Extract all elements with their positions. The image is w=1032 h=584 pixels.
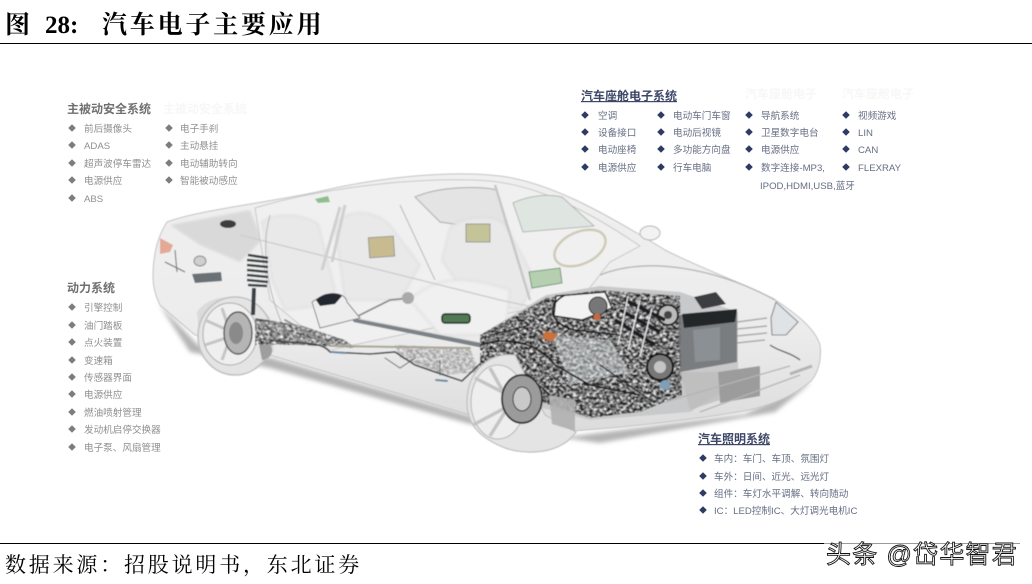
cabin list: 电动座椅 [598,144,637,156]
transmission [312,292,414,328]
engine bay [480,286,767,420]
radiator block [678,310,737,372]
faded ghost headings [745,86,914,101]
title: 图 [5,11,30,39]
powertrain list [68,302,161,454]
powertrain list: 点火装置 [84,337,123,349]
green dashboard module [529,268,562,288]
watermark: 头条 @岱华智君 [826,541,1018,569]
safety list: ABS [84,194,103,205]
underbody clutter [255,318,355,348]
grille [737,318,767,343]
hood outline and nose [600,266,812,412]
panel: active and passive safety [67,101,247,205]
title: 汽车电子主要应用 [102,11,324,39]
lighting list: 车外：日间、近光、远光灯 [714,471,830,483]
windshield [513,195,594,232]
lighting list [699,453,857,517]
engine manifold [554,292,612,320]
cabin list: 电动后视镜 [673,127,721,139]
panel: lighting [698,431,857,517]
car ground shadow [158,303,812,443]
safety list: 电子手刹 [180,123,218,135]
heading: powertrain: 动力系统 [67,280,115,295]
cabin list: FLEXRAY [858,163,902,174]
trunk shading [170,210,262,262]
rear suspension spring [247,255,268,315]
powertrain list: 引擎控制 [84,302,122,314]
cabin list: 电源供应 [598,162,637,174]
lighting list: 车内：车门、车顶、氛围灯 [714,453,830,465]
cabin list: 行车电脑 [673,162,712,174]
cabin list [581,110,902,192]
cabin list: 空调 [598,110,617,122]
steering wheel [549,222,611,274]
cabin list: 电源供应 [761,144,800,156]
car cutaway illustration [153,174,821,452]
side mirror [640,226,660,240]
cabin list: 设备接口 [598,127,636,139]
cabin list: 多功能方向盘 [673,144,731,156]
lighting list: 组件：车灯水平调解、转向随动 [714,488,849,500]
powertrain list: 电子泵、风扇管理 [84,442,161,454]
safety list: ADAS [84,141,110,152]
powertrain list: 变速箱 [84,355,113,367]
safety list: 主动悬挂 [180,140,219,152]
rear wheel [197,297,274,375]
rear parts [165,220,236,283]
safety list: 电源供应 [84,175,123,187]
source footer: 数据来源：招股说明书，东北证券 [5,553,362,578]
headrest screens [368,224,490,258]
powertrain list: 电源供应 [84,389,123,401]
cabin list: 卫星数字电台 [761,127,819,139]
cabin list: 电动车门车窗 [673,110,731,122]
powertrain list: 油门踏板 [84,320,123,332]
cabin list: CAN [858,145,878,156]
cabin list: 视频游戏 [858,110,897,122]
cabin list: IPOD,HDMI,USB,蓝牙 [760,180,855,192]
seats [262,213,535,335]
green controller [442,314,470,323]
cabin interior [255,180,640,350]
safety list [68,123,238,205]
front wheel [467,355,576,452]
headlight [771,302,798,335]
powertrain list: 发动机启停交换器 [84,424,161,436]
panel: cabin electronics [581,86,914,192]
safety list: 超声波停车雷达 [84,158,152,170]
faded ghost headings: 汽车座舱电子 [745,86,817,101]
faded ghost headings: 汽车座舱电子 [842,86,914,101]
side window [415,188,508,232]
fin antenna [315,196,330,203]
pillar lines [240,185,640,340]
faded ghost heading: 主被动安全系统 [163,101,247,116]
heading: lighting: 汽车照明系统 [698,431,770,446]
heading: cabin: 汽车座舱电子系统 [581,88,677,103]
bumper patch [718,366,760,403]
heading: safety: 主被动安全系统 [67,101,151,116]
drive shaft and chassis lines [270,298,482,381]
car body [153,174,821,431]
title [0,11,1032,44]
rear light [160,238,173,254]
safety list: 电动辅助转向 [180,158,238,170]
safety list: 前后摄像头 [84,123,132,135]
cabin list: 数字连接-MP3, [761,162,825,174]
panel: powertrain [67,280,161,454]
cabin list: 导航系统 [761,110,800,122]
lighting list: IC：LED控制IC、大灯调光电机IC [714,505,857,517]
title: 28: [45,12,78,39]
cabin list: LIN [858,128,873,139]
powertrain list: 燃油喷射管理 [84,407,142,419]
safety list: 智能被动感应 [180,175,238,187]
powertrain list: 传感器界面 [84,372,132,384]
